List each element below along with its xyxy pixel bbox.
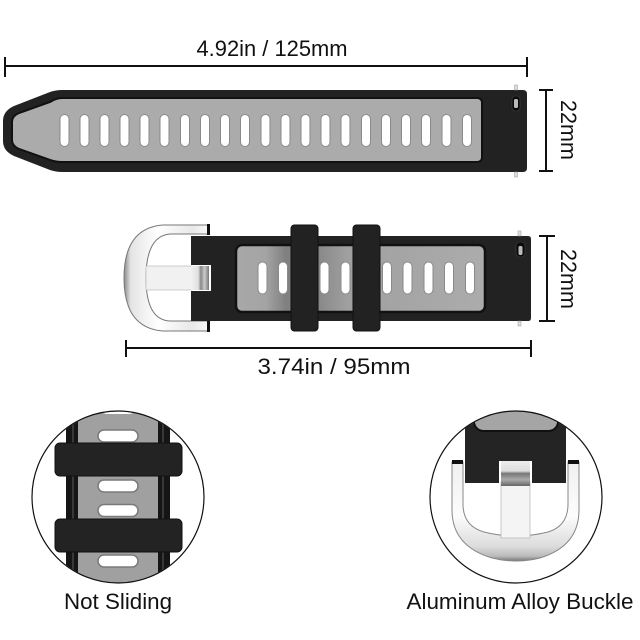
caption: Aluminum Alloy Buckle: Aluminum Alloy Buckle [406, 589, 634, 614]
keeper loop left [291, 225, 318, 331]
keeper loop right [353, 225, 380, 331]
short strap slots [258, 262, 474, 294]
strap gray inset [12, 98, 482, 162]
short strap with buckle [124, 224, 531, 332]
long strap [3, 85, 527, 177]
detail circle: not sliding [32, 400, 204, 590]
buckle tips [207, 224, 210, 332]
keeper bottom [55, 519, 182, 552]
circle outline [430, 411, 602, 583]
buckle tips [452, 460, 579, 464]
short strap spring bar [516, 231, 525, 326]
buckle hinge [191, 266, 209, 290]
dimension: top strap width [539, 90, 581, 171]
strap slots [60, 114, 472, 146]
dimension: short strap width [539, 236, 581, 321]
keeper top [55, 443, 182, 476]
circle clipped strap [66, 400, 170, 590]
dimension: top strap length [5, 36, 527, 77]
buckle frame [452, 462, 579, 561]
buckle hinge [501, 461, 530, 486]
label: 3.74in / 95mm: 3.74in / 95mm [258, 354, 410, 379]
short strap gray window [236, 245, 485, 312]
caption: Not Sliding: Not Sliding [64, 589, 172, 614]
detail circle: aluminum alloy buckle [430, 405, 602, 583]
strap end black [465, 405, 566, 483]
buckle tongue [501, 482, 530, 538]
short strap black body [191, 236, 531, 321]
strap spring bar [512, 85, 520, 177]
label: 22mm: 22mm [556, 100, 581, 160]
circle outline [32, 411, 204, 583]
dimension: short strap length [126, 340, 531, 379]
label: 22mm: 22mm [556, 249, 581, 309]
buckle frame [124, 225, 209, 331]
strap black body [3, 90, 527, 172]
label: 4.92in / 125mm: 4.92in / 125mm [196, 36, 348, 61]
buckle tongue [146, 266, 192, 290]
